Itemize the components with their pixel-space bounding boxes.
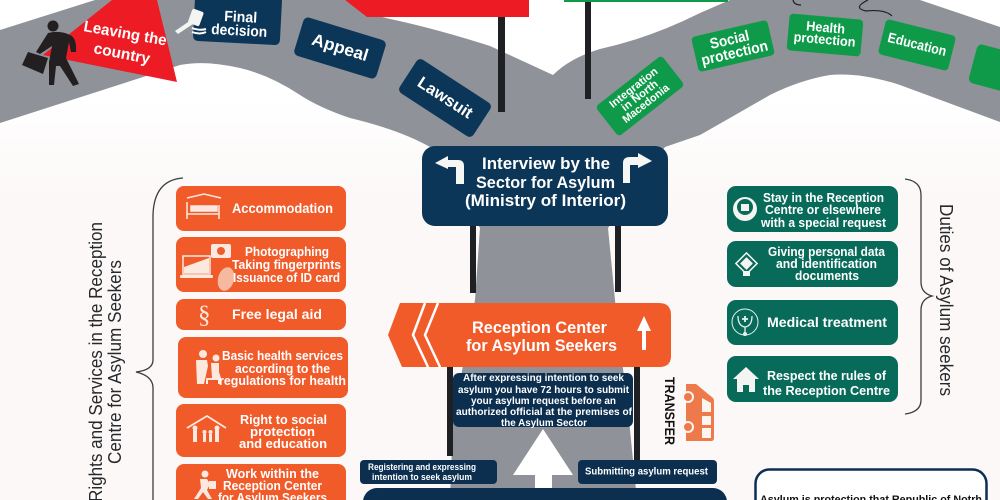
- heading: duties of asylum seekers: Duties of Asylum seekers: [936, 204, 956, 396]
- label: registering and expressing intention: [360, 460, 497, 484]
- panel: accommodation: Accommodation: [232, 201, 333, 216]
- transfer label: TRANSFER: [662, 377, 678, 445]
- panel: right to social protection and education: [176, 404, 346, 457]
- panel: photographing, fingerprints, ID: [176, 237, 346, 293]
- icon: doctor and patient: [196, 350, 221, 384]
- panel: giving personal data: Giving personal data: [768, 245, 886, 259]
- panel: medical treatment: Medical treatment: [767, 315, 888, 330]
- icon: gavel: [175, 8, 206, 34]
- icon: house in circular arrow: [733, 197, 757, 221]
- sign: green top banner: [564, 0, 728, 99]
- sign: interview by the Sector for Asylum: Sector for Asylum: [476, 173, 615, 192]
- black squiggles: [793, 0, 892, 16]
- sign: leaving the country: country: [92, 40, 152, 68]
- label: submitting asylum request: [578, 460, 717, 484]
- sign: reception center for asylum seekers: Reception Center: [472, 318, 607, 337]
- label: registering and expressing intention: Registering and expressing: [368, 462, 476, 472]
- icon: person carrying box: [194, 470, 216, 499]
- label: registering and expressing intention: intention to seek asylum: [372, 472, 472, 482]
- note: 72 hours: [453, 372, 633, 429]
- sign: interview by the Sector for Asylum: Interview by the: [482, 154, 610, 173]
- panel: respect the rules: Respect the rules of: [767, 368, 887, 383]
- icon: up arrow: [637, 316, 651, 350]
- heading: rights and services: Rights and Services in the Reception: [86, 222, 106, 500]
- sign: interview by the Sector for Asylum: [422, 146, 668, 293]
- panel: right to social protection and education: Right to social: [240, 413, 327, 427]
- panel: giving personal data: and identification: [776, 257, 877, 271]
- panel: free legal aid: Free legal aid: [232, 307, 322, 322]
- note: 72 hours: After expressing intention to seek: [463, 372, 624, 384]
- sign: integration in North Macedonia: in North: [619, 78, 661, 114]
- sign: lawsuit: Lawsuit: [414, 74, 476, 123]
- sign: reception center for asylum seekers: for Asylum Seekers: [466, 336, 617, 355]
- panel: stay in reception centre: with a special request: [760, 216, 887, 230]
- icon: laptop, camera and fingerprint: [180, 244, 237, 293]
- panel: free legal aid: §: [198, 302, 210, 329]
- sign: integration in North Macedonia: Macedonia: [620, 81, 673, 126]
- icon: turn right arrow: [623, 153, 652, 183]
- sign: leaving the country: [43, 0, 177, 82]
- sign: health protection: Health: [806, 18, 846, 37]
- icon: walking person with briefcase: [22, 20, 79, 86]
- panel: giving personal data: [727, 241, 898, 287]
- panel: giving personal data: documents: [795, 269, 859, 283]
- panel: medical treatment: [727, 300, 898, 345]
- icon: identification card in hand: [736, 253, 757, 276]
- note: 72 hours: your asylum request before an: [471, 395, 616, 407]
- sign: appeal: Appeal: [310, 30, 371, 65]
- sign: final decision: Final: [224, 8, 258, 27]
- note: 72 hours: asylum you have 72 hours to submit: [458, 384, 629, 396]
- panel: basic health services: [178, 337, 348, 398]
- icon: orange bus: [683, 384, 714, 441]
- icon: turn left arrow: [435, 156, 464, 184]
- panel: stay in reception centre: Stay in the Reception: [763, 191, 884, 205]
- sign: integration in North Macedonia: Integration: [607, 65, 661, 111]
- sign: leaving the country: Leaving the: [82, 18, 168, 50]
- panel: right to social protection and education: and education: [239, 437, 327, 451]
- panel: respect the rules: the Reception Centre: [763, 383, 890, 398]
- icon: house: [733, 367, 759, 392]
- sign: social protection: [691, 20, 775, 72]
- left bracket: [136, 178, 183, 500]
- note: 72 hours: the Asylum Sector: [501, 417, 587, 429]
- panel: work within the reception center: [176, 464, 346, 500]
- panel: photographing, fingerprints, ID: Taking fingerprints: [232, 258, 341, 272]
- right bracket: [905, 179, 932, 414]
- sign: final decision: decision: [211, 21, 268, 41]
- sign: education: Education: [886, 29, 948, 59]
- label: submitting asylum request: Submitting asylum request: [585, 466, 709, 478]
- panel: work within the reception center: Reception Center: [223, 479, 322, 493]
- sign: interview by the Sector for Asylum: (Ministry of Interior): [465, 191, 626, 210]
- sign: social protection: protection: [700, 37, 770, 69]
- sign: integration in North Macedonia: [595, 55, 685, 137]
- sign: health protection: [787, 13, 863, 57]
- icon: bed under roof: [187, 194, 221, 219]
- white up arrow: [513, 429, 573, 490]
- panel: photographing, fingerprints, ID: Issuance of ID card: [233, 271, 340, 285]
- heading: rights and services: [86, 222, 125, 500]
- heading: rights and services: Centre for Asylum Seekers: [105, 260, 125, 464]
- panel: stay in reception centre: [727, 186, 898, 232]
- panel: definition of asylum: [756, 470, 986, 500]
- panel: right to social protection and education: protection: [250, 425, 315, 439]
- panel: free legal aid: [176, 299, 346, 330]
- panel: basic health services: regulations for health: [219, 374, 346, 388]
- panel: respect the rules: [727, 356, 898, 402]
- bottom navy panel: [363, 488, 727, 500]
- sign: appeal: [293, 16, 387, 80]
- sign: reception center for asylum seekers: [388, 303, 671, 460]
- sign: red top banner: [345, 0, 529, 112]
- panel: basic health services: Basic health services: [222, 349, 343, 363]
- panel: photographing, fingerprints, ID: Photographing: [245, 245, 329, 259]
- panel: accommodation: [176, 186, 346, 231]
- panel: stay in reception centre: Centre or elsewhere: [765, 203, 881, 217]
- icon: stethoscope in circle: [732, 309, 758, 336]
- panel: work within the reception center: Work within the: [226, 467, 319, 481]
- sign: education: [878, 19, 956, 71]
- sign: lawsuit: [397, 57, 493, 139]
- note: 72 hours: authorized official at the premises of: [456, 406, 632, 418]
- sign: health protection: protection: [793, 29, 856, 50]
- panel: basic health services: according to the: [235, 362, 330, 376]
- sign: cut-off green tag: [968, 43, 1000, 98]
- sign: final decision: [193, 0, 282, 45]
- icon: family under roof: [187, 416, 226, 442]
- sign: social protection: Social: [708, 27, 751, 53]
